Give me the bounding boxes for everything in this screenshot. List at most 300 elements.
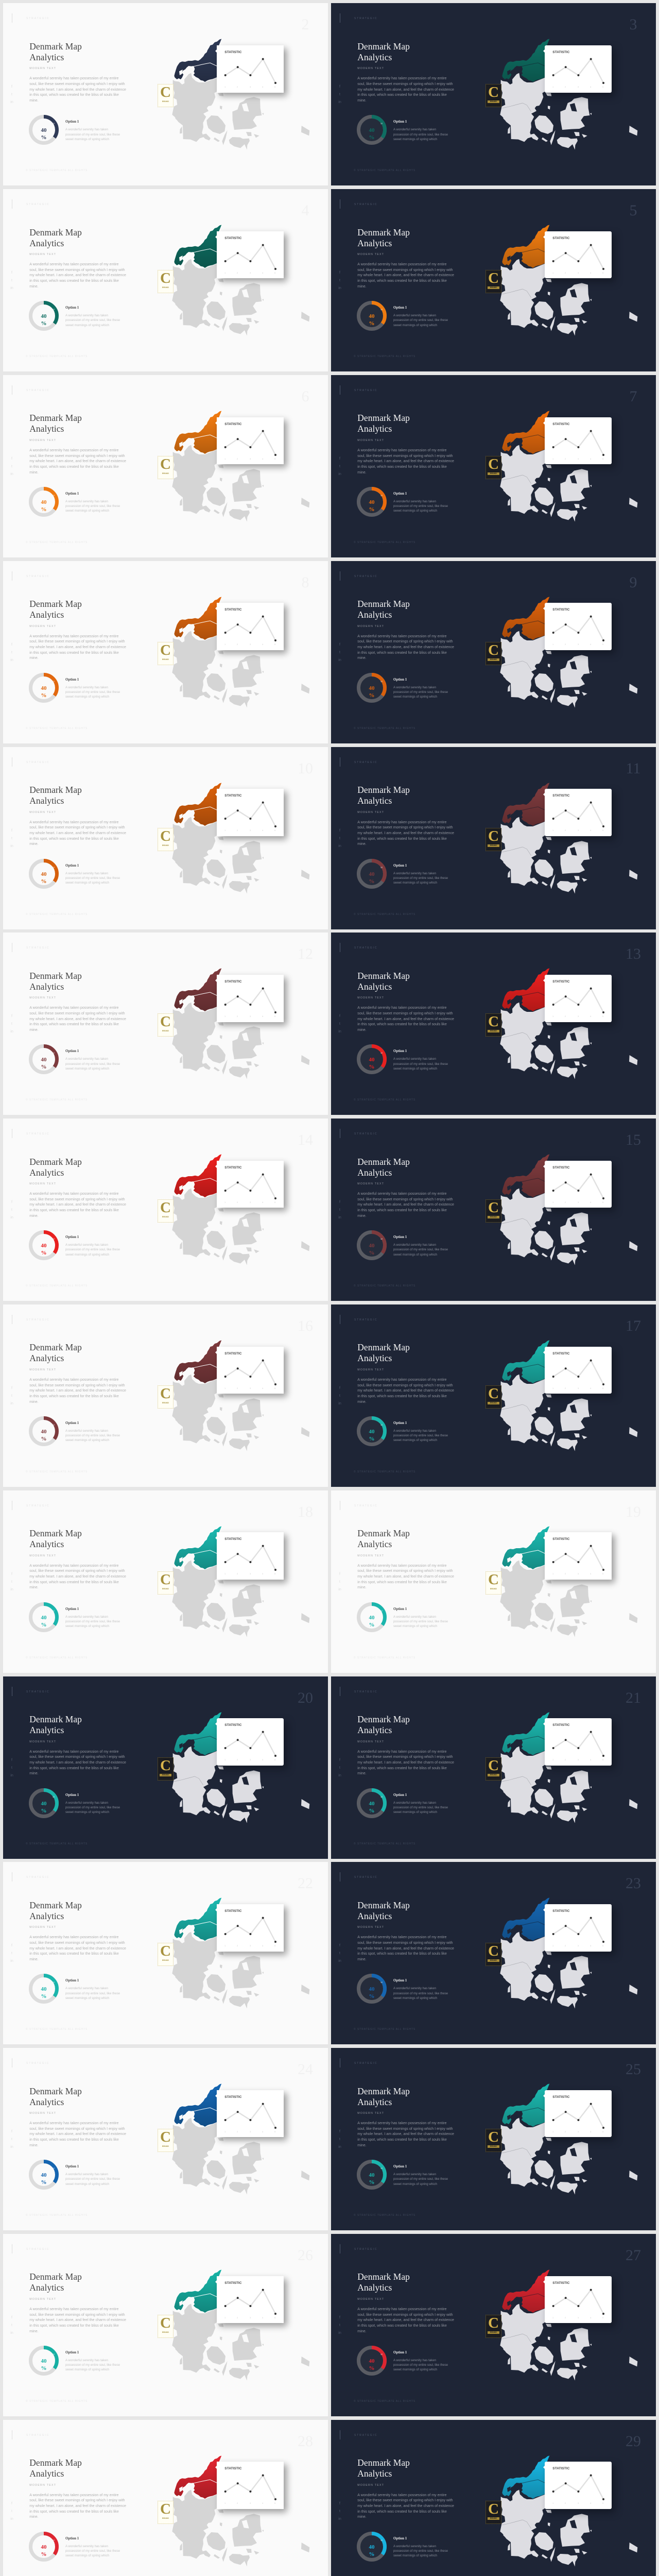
donut chart: %	[369, 2179, 375, 2185]
body text	[29, 1005, 126, 1033]
social icons: f	[11, 1758, 12, 1762]
panel: slide 28	[3, 2420, 328, 2576]
donut chart: %	[41, 134, 46, 141]
body text: my whole heart. I am alone, and feel the charm of existence	[29, 1760, 126, 1765]
body text: my whole heart. I am alone, and feel the charm of existence	[357, 1574, 454, 1579]
body text: A wonderful serenity has taken possession of my entire	[29, 1192, 118, 1196]
title: Denmark Map	[357, 1528, 410, 1538]
logo badge	[158, 2129, 174, 2152]
logo badge: BRAND	[162, 2331, 169, 2333]
title: Analytics	[29, 238, 64, 248]
statistic card	[545, 45, 612, 93]
social icons	[9, 2128, 15, 2151]
logo badge: BRAND	[162, 844, 169, 846]
subtitle: MODERN TEXT	[29, 1554, 56, 1557]
donut chart: %	[369, 1807, 375, 1814]
donut chart: %	[41, 320, 46, 327]
statistic card	[217, 1718, 284, 1766]
social icons: t	[11, 2324, 12, 2327]
social icons: t	[11, 465, 12, 468]
donut chart: 12	[380, 1424, 383, 1426]
logo badge: BRAND	[162, 1959, 169, 1961]
social icons	[337, 1384, 343, 1408]
body text: in this spot, which was created for the bliss of souls like	[357, 1952, 447, 1956]
option text	[65, 1421, 120, 1443]
body text: A wonderful serenity has taken possession of my entire	[357, 448, 446, 452]
option text: possession of my entire soul, like these	[393, 876, 448, 880]
social icons: f	[339, 2316, 340, 2319]
body text: my whole heart. I am alone, and feel the charm of existence	[29, 831, 126, 835]
title: Denmark Map	[357, 785, 410, 795]
logo badge	[158, 1385, 174, 1409]
subtitle: MODERN TEXT	[29, 1368, 56, 1371]
option text: Option 1	[65, 2536, 79, 2540]
social icons: f	[339, 1200, 340, 1204]
social icons: t	[339, 2138, 340, 2141]
social icons: t	[339, 837, 340, 840]
body text	[29, 2121, 126, 2148]
title: Analytics	[357, 423, 392, 434]
option text: possession of my entire soul, like these	[65, 1062, 120, 1066]
statistic card: STATISTIC	[224, 50, 241, 54]
subtitle: MODERN TEXT	[357, 1926, 384, 1929]
social icons: in	[10, 1773, 13, 1777]
logo badge: BRAND	[490, 658, 497, 660]
logo badge: C	[488, 642, 499, 658]
logo badge: C	[160, 1199, 171, 1216]
body text: mine.	[29, 1771, 39, 1775]
logo badge: C	[160, 1013, 171, 1030]
statistic card: STATISTIC	[552, 1723, 569, 1727]
title: Denmark Map	[357, 1342, 410, 1352]
body text: my whole heart. I am alone, and feel the charm of existence	[29, 2504, 126, 2508]
header label: STRATEGIC	[354, 2248, 377, 2251]
logo badge: C	[488, 1199, 499, 1216]
donut chart: 40	[41, 2544, 47, 2550]
body text: in this spot, which was created for the bliss of souls like	[29, 2138, 119, 2142]
body text: in this spot, which was created for the bliss of souls like	[357, 1580, 447, 1584]
page number: 13	[626, 945, 641, 962]
option text: A wonderful serenity has taken	[393, 2359, 436, 2362]
logo badge	[485, 2501, 501, 2524]
title: Analytics	[29, 1167, 64, 1178]
option text: possession of my entire soul, like these	[393, 2177, 448, 2181]
title: Denmark Map	[357, 599, 410, 609]
body text: A wonderful serenity has taken possession of my entire	[29, 820, 118, 824]
statistic card: STATISTIC	[224, 2095, 241, 2099]
body text: mine.	[29, 1214, 39, 1218]
statistic card: 12345	[552, 643, 604, 646]
panel: slide 15	[331, 1118, 656, 1301]
subtitle: MODERN TEXT	[29, 811, 56, 814]
social icons: t	[339, 279, 340, 282]
statistic card: STATISTIC	[224, 794, 241, 798]
option text: Option 1	[393, 1793, 407, 1797]
option text	[393, 120, 448, 141]
map of Denmark	[172, 225, 310, 336]
footer: © STRATEGIC TEMPLATE ALL RIGHTS	[26, 913, 88, 916]
social icons	[9, 2314, 15, 2337]
option text: A wonderful serenity has taken	[65, 1057, 108, 1061]
body text: soul, like these sweet mornings of spring which I enjoy with	[29, 1383, 125, 1387]
panel: slide 10	[3, 747, 328, 929]
logo badge	[158, 84, 174, 107]
body text: soul, like these sweet mornings of spring which I enjoy with	[29, 639, 125, 643]
body text: my whole heart. I am alone, and feel the charm of existence	[29, 273, 126, 277]
social icons: f	[339, 271, 340, 275]
subtitle: MODERN TEXT	[357, 625, 384, 628]
map of Denmark	[331, 747, 656, 929]
donut chart: 12	[53, 1424, 55, 1426]
option text: sweet mornings of spring which	[393, 695, 437, 699]
logo badge: C	[160, 1571, 171, 1588]
body text: my whole heart. I am alone, and feel the charm of existence	[29, 1946, 126, 1951]
logo badge: BRAND	[490, 100, 497, 103]
body text: A wonderful serenity has taken possession of my entire	[357, 1006, 446, 1010]
social icons	[337, 2128, 343, 2151]
donut chart: 12	[380, 2353, 383, 2355]
social icons: t	[339, 465, 340, 468]
social icons: t	[11, 1394, 12, 1398]
body text: soul, like these sweet mornings of spring which I enjoy with	[357, 268, 453, 272]
body text: my whole heart. I am alone, and feel the charm of existence	[29, 645, 126, 649]
body text	[29, 1935, 126, 1962]
body text: soul, like these sweet mornings of spring which I enjoy with	[29, 454, 125, 458]
body text: mine.	[357, 2515, 367, 2519]
statistic card	[545, 2276, 612, 2323]
statistic card: 12345	[224, 1944, 276, 1947]
social icons	[9, 641, 15, 664]
social icons	[10, 456, 13, 476]
donut chart	[356, 1602, 387, 1633]
body text: soul, like these sweet mornings of spring which I enjoy with	[357, 2313, 453, 2317]
option text: A wonderful serenity has taken	[65, 1987, 108, 1990]
option text	[393, 1421, 448, 1443]
logo badge: BRAND	[490, 1959, 497, 1961]
social icons: in	[338, 658, 341, 662]
option text: A wonderful serenity has taken	[65, 128, 108, 131]
footer: © STRATEGIC TEMPLATE ALL RIGHTS	[26, 2400, 88, 2403]
statistic card: 12345	[224, 643, 276, 646]
logo badge	[158, 2315, 174, 2338]
subtitle: MODERN TEXT	[29, 2112, 56, 2115]
page number: 6	[302, 388, 309, 405]
panel: slide 8	[3, 561, 328, 743]
footer: © STRATEGIC TEMPLATE ALL RIGHTS	[354, 355, 415, 358]
body text: mine.	[29, 1957, 39, 1961]
logo badge: BRAND	[490, 1216, 497, 1218]
footer: © STRATEGIC TEMPLATE ALL RIGHTS	[354, 727, 415, 730]
option text	[65, 2164, 120, 2187]
statistic card: STATISTIC	[552, 2095, 569, 2099]
title: Analytics	[29, 52, 64, 62]
logo badge: C	[488, 1013, 499, 1030]
option text: possession of my entire soul, like these	[393, 1620, 448, 1623]
title: Denmark Map	[357, 41, 410, 52]
title: Denmark Map	[29, 1900, 82, 1910]
option text: sweet mornings of spring which	[393, 1067, 437, 1071]
donut chart: 40	[369, 871, 375, 877]
donut chart: 12	[380, 2167, 383, 2170]
logo badge: BRAND	[162, 1588, 169, 1590]
title: Denmark Map	[29, 1157, 82, 1167]
logo badge	[158, 2501, 174, 2524]
social icons: f	[339, 1014, 340, 1018]
donut chart: 40	[41, 2172, 47, 2178]
social icons: f	[339, 85, 340, 89]
panel: slide 23	[331, 1862, 656, 2044]
body text: soul, like these sweet mornings of spring which I enjoy with	[357, 2127, 453, 2131]
social icons: f	[339, 828, 340, 833]
option text: Option 1	[393, 1978, 407, 1982]
option text: possession of my entire soul, like these	[65, 2177, 120, 2181]
donut chart	[356, 1044, 387, 1075]
map of Denmark	[331, 1304, 656, 1487]
page number: 23	[626, 1875, 641, 1892]
social icons: in	[338, 2517, 341, 2521]
body text: in this spot, which was created for the bliss of souls like	[29, 2324, 119, 2328]
title	[29, 227, 82, 248]
body text	[29, 1749, 126, 1776]
social icons: in	[338, 2331, 341, 2335]
map of Denmark	[3, 2234, 328, 2416]
statistic card: STATISTIC	[224, 236, 241, 240]
subtitle: MODERN TEXT	[357, 2112, 384, 2115]
title: Analytics	[357, 1725, 392, 1735]
statistic card: STATISTIC	[552, 794, 569, 798]
title: Analytics	[29, 795, 64, 806]
social icons: f	[339, 457, 340, 461]
title	[357, 1900, 410, 1922]
subtitle: MODERN TEXT	[357, 67, 384, 70]
donut chart: 40	[41, 871, 47, 877]
body text: in this spot, which was created for the bliss of souls like	[29, 465, 119, 469]
option text: A wonderful serenity has taken	[393, 2173, 436, 2176]
subtitle: MODERN TEXT	[357, 1368, 384, 1371]
statistic card: 12345	[552, 1944, 604, 1947]
logo badge	[485, 2129, 501, 2152]
title: Analytics	[357, 1353, 392, 1363]
option text: A wonderful serenity has taken	[65, 2173, 108, 2176]
map of Denmark	[331, 933, 656, 1115]
statistic card: STATISTIC	[552, 1537, 569, 1541]
body text	[357, 76, 454, 103]
title: Denmark Map	[357, 1714, 410, 1724]
body text: A wonderful serenity has taken possession of my entire	[29, 2307, 118, 2311]
title: Denmark Map	[29, 785, 82, 795]
option text: Option 1	[65, 306, 79, 310]
social icons: in	[10, 1030, 13, 1033]
panel: slide 11	[331, 747, 656, 929]
option text: sweet mornings of spring which	[65, 1996, 109, 2000]
option text: A wonderful serenity has taken	[393, 1987, 436, 1990]
body text	[29, 2493, 126, 2520]
body text: A wonderful serenity has taken possession of my entire	[29, 76, 118, 80]
option text: possession of my entire soul, like these	[393, 1248, 448, 1251]
footer: © STRATEGIC TEMPLATE ALL RIGHTS	[354, 1098, 415, 1101]
title	[29, 41, 82, 62]
statistic card: 12345	[224, 1758, 276, 1761]
page number: 19	[626, 1503, 641, 1520]
body text: mine.	[29, 98, 39, 103]
body text: my whole heart. I am alone, and feel the charm of existence	[357, 2132, 454, 2136]
social icons	[9, 2500, 15, 2523]
body text	[357, 1935, 454, 1962]
donut chart: 12	[53, 2353, 55, 2355]
option text: sweet mornings of spring which	[393, 2182, 437, 2186]
donut chart: 40	[41, 1057, 47, 1063]
title: Denmark Map	[29, 2086, 82, 2096]
subtitle: MODERN TEXT	[357, 2298, 384, 2301]
body text	[357, 1749, 454, 1776]
body text: mine.	[29, 1585, 39, 1589]
donut chart	[356, 2345, 387, 2376]
body text: A wonderful serenity has taken possession of my entire	[29, 634, 118, 638]
social icons: t	[11, 837, 12, 840]
title: Denmark Map	[29, 227, 82, 238]
social icons	[10, 84, 13, 104]
statistic card: 12345	[552, 1387, 604, 1389]
body text: in this spot, which was created for the bliss of souls like	[29, 2510, 119, 2514]
statistic card: 12345	[224, 2316, 276, 2319]
logo badge	[158, 1757, 174, 1781]
body text: soul, like these sweet mornings of spring which I enjoy with	[29, 82, 125, 86]
donut chart	[28, 1788, 59, 1819]
panel: slide 21	[331, 1676, 656, 1859]
footer: © STRATEGIC TEMPLATE ALL RIGHTS	[354, 1842, 415, 1845]
logo badge	[158, 1943, 174, 1966]
body text: my whole heart. I am alone, and feel the charm of existence	[357, 2318, 454, 2322]
social icons: f	[11, 1944, 12, 1947]
social icons: f	[339, 1758, 340, 1762]
body text: my whole heart. I am alone, and feel the charm of existence	[29, 1388, 126, 1393]
logo badge: C	[160, 2315, 171, 2331]
donut chart: 12	[380, 1238, 383, 1240]
option text: Option 1	[393, 306, 407, 310]
page number: 12	[298, 945, 313, 962]
donut chart: %	[369, 1064, 375, 1070]
logo badge	[158, 642, 174, 665]
panel: slide 16	[3, 1304, 328, 1487]
option text: Option 1	[65, 2164, 79, 2168]
option text: sweet mornings of spring which	[393, 881, 437, 885]
social icons	[337, 1942, 343, 1965]
logo badge: BRAND	[490, 1588, 497, 1590]
statistic card: STATISTIC	[224, 1537, 241, 1541]
donut chart: %	[41, 878, 46, 884]
social icons: in	[338, 472, 341, 476]
page number: 4	[302, 202, 309, 219]
option text: sweet mornings of spring which	[393, 1624, 437, 1628]
option text: sweet mornings of spring which	[393, 1253, 437, 1257]
body text: soul, like these sweet mornings of spring which I enjoy with	[29, 1011, 125, 1015]
footer: © STRATEGIC TEMPLATE ALL RIGHTS	[26, 2214, 88, 2217]
map of Denmark	[331, 1118, 656, 1301]
logo badge	[158, 827, 174, 851]
header label: STRATEGIC	[26, 1690, 49, 1693]
donut chart: 12	[380, 1610, 383, 1612]
social icons: f	[11, 643, 12, 647]
donut chart: 12	[380, 309, 383, 311]
logo badge: C	[488, 1943, 499, 1959]
title: Denmark Map	[29, 971, 82, 981]
body text: mine.	[29, 656, 39, 660]
option text: sweet mornings of spring which	[65, 509, 109, 513]
map of Denmark	[3, 933, 328, 1115]
donut chart: 12	[53, 867, 55, 869]
donut chart: 12	[53, 2539, 55, 2541]
subtitle: MODERN TEXT	[357, 1554, 384, 1557]
page number: 2	[302, 16, 309, 33]
header label: STRATEGIC	[354, 2062, 377, 2065]
logo badge: C	[160, 270, 171, 286]
donut chart: 12	[380, 867, 383, 869]
statistic card: STATISTIC	[224, 1166, 241, 1170]
social icons: in	[10, 1402, 13, 1405]
option text: possession of my entire soul, like these	[393, 2549, 448, 2553]
panel: slide 12	[3, 933, 328, 1115]
body text: A wonderful serenity has taken possession of my entire	[29, 1935, 118, 1939]
body text: A wonderful serenity has taken possession of my entire	[357, 1192, 446, 1196]
option text	[65, 492, 120, 513]
donut chart	[356, 1230, 387, 1261]
body text: in this spot, which was created for the bliss of souls like	[29, 1766, 119, 1770]
body text: mine.	[357, 284, 367, 289]
logo badge: C	[160, 1385, 171, 1402]
logo badge: C	[488, 270, 499, 286]
option text: possession of my entire soul, like these	[393, 1434, 448, 1437]
donut chart: %	[41, 2365, 46, 2371]
donut chart	[356, 1416, 387, 1447]
statistic card: STATISTIC	[224, 1723, 241, 1727]
logo badge: BRAND	[162, 1402, 169, 1404]
body text: A wonderful serenity has taken possession of my entire	[29, 1564, 118, 1568]
statistic card: STATISTIC	[224, 2467, 241, 2470]
body text: my whole heart. I am alone, and feel the charm of existence	[29, 2132, 126, 2136]
option text: sweet mornings of spring which	[393, 324, 437, 327]
statistic card	[217, 1161, 284, 1208]
body text	[357, 1191, 454, 1218]
option text: A wonderful serenity has taken	[393, 686, 436, 689]
option text: A wonderful serenity has taken	[65, 2359, 108, 2362]
title: Analytics	[29, 423, 64, 434]
option text: Option 1	[65, 1421, 79, 1425]
title	[29, 1528, 82, 1550]
page number: 26	[298, 2247, 313, 2264]
social icons: t	[339, 1394, 340, 1398]
statistic card: STATISTIC	[552, 2467, 569, 2470]
statistic card: 12345	[224, 86, 276, 88]
statistic card: STATISTIC	[224, 2281, 241, 2285]
statistic card: 12345	[224, 1387, 276, 1389]
option text: A wonderful serenity has taken	[65, 1243, 108, 1247]
option text: sweet mornings of spring which	[393, 1438, 437, 1442]
statistic card	[217, 2090, 284, 2137]
body text	[357, 1377, 454, 1404]
body text	[357, 2307, 454, 2334]
logo badge: C	[488, 456, 499, 472]
donut chart	[357, 487, 387, 517]
page number: 11	[626, 759, 640, 777]
logo badge: C	[488, 2315, 499, 2331]
title: Denmark Map	[29, 1714, 82, 1724]
social icons: in	[10, 2517, 13, 2521]
statistic card: 12345	[552, 2130, 604, 2133]
social icons: t	[11, 1952, 12, 1955]
option text	[65, 306, 120, 327]
body text: mine.	[357, 98, 367, 103]
social icons: t	[339, 1580, 340, 1584]
